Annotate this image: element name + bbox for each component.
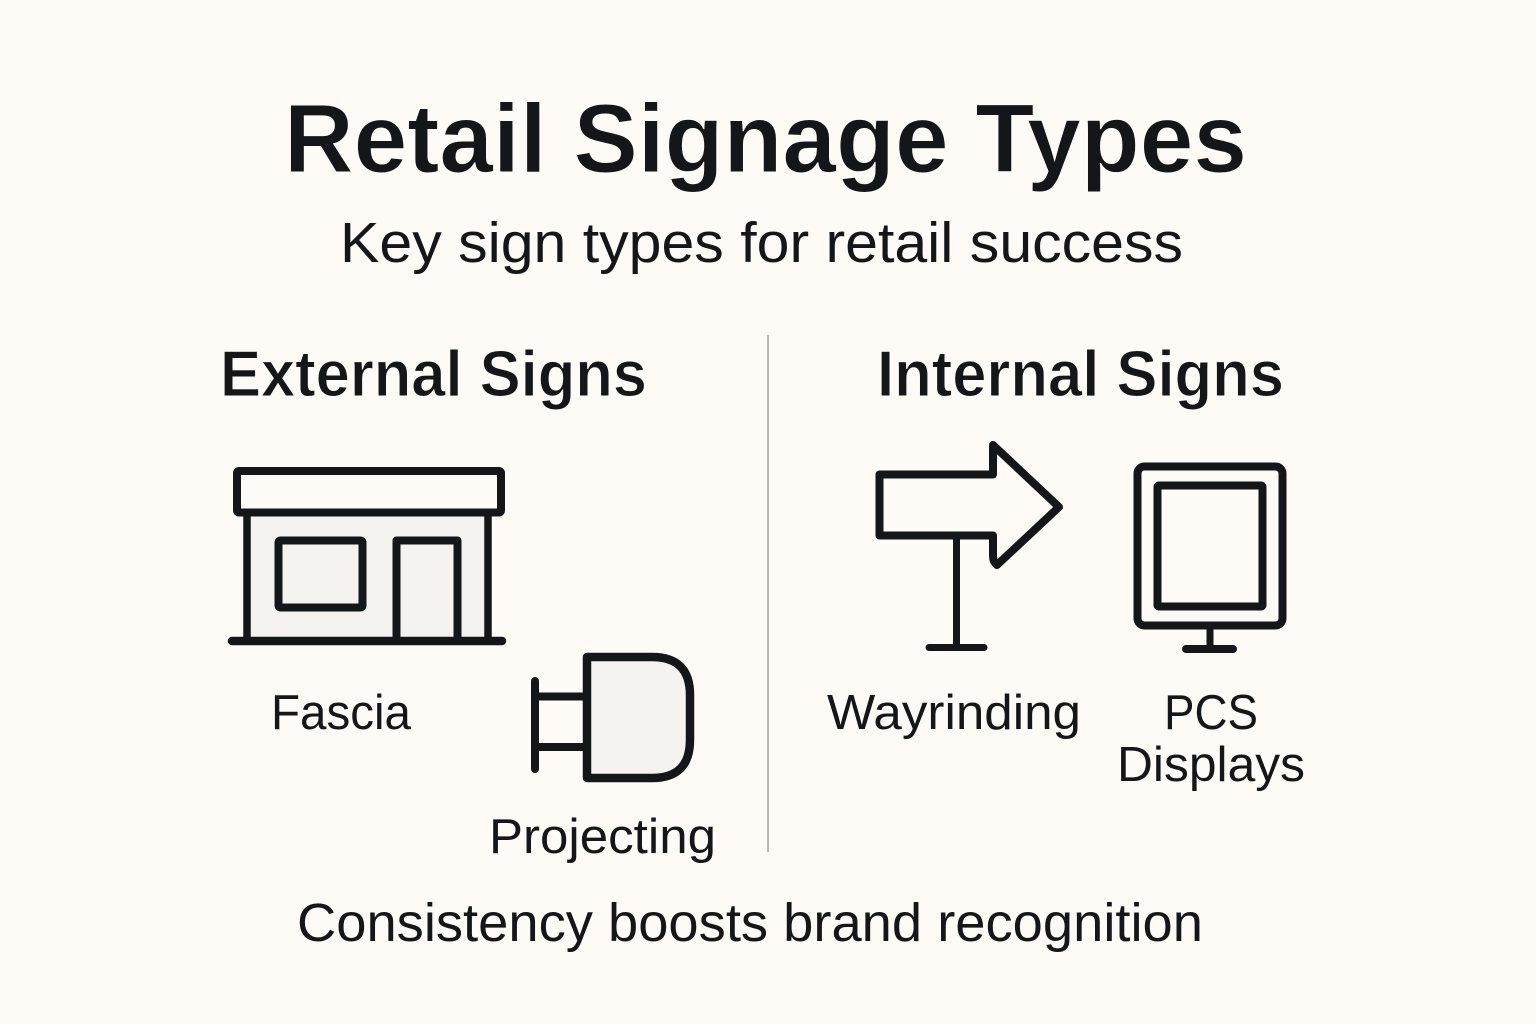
label: projecting: Projecting	[489, 810, 716, 864]
label: fascia: Fascia	[271, 686, 412, 740]
label: displays: Displays	[1117, 738, 1305, 792]
label: pcs: PCS	[1164, 686, 1258, 740]
icon: wayfinding arrow sign	[880, 445, 1059, 648]
subtitle: Key sign types for retail success	[340, 211, 1183, 275]
footer message: Consistency boosts brand recognition	[297, 893, 1203, 953]
icon: fascia storefront	[232, 471, 502, 641]
heading: internal signs: Internal Signs	[877, 337, 1284, 410]
title: Retail Signage Types	[284, 84, 1247, 193]
heading: external signs: External Signs	[220, 337, 647, 410]
label: wayfinding: Wayrinding	[827, 686, 1081, 740]
icon: pcs display	[1138, 466, 1282, 649]
icon: projecting sign	[535, 657, 690, 778]
divider	[767, 335, 769, 852]
